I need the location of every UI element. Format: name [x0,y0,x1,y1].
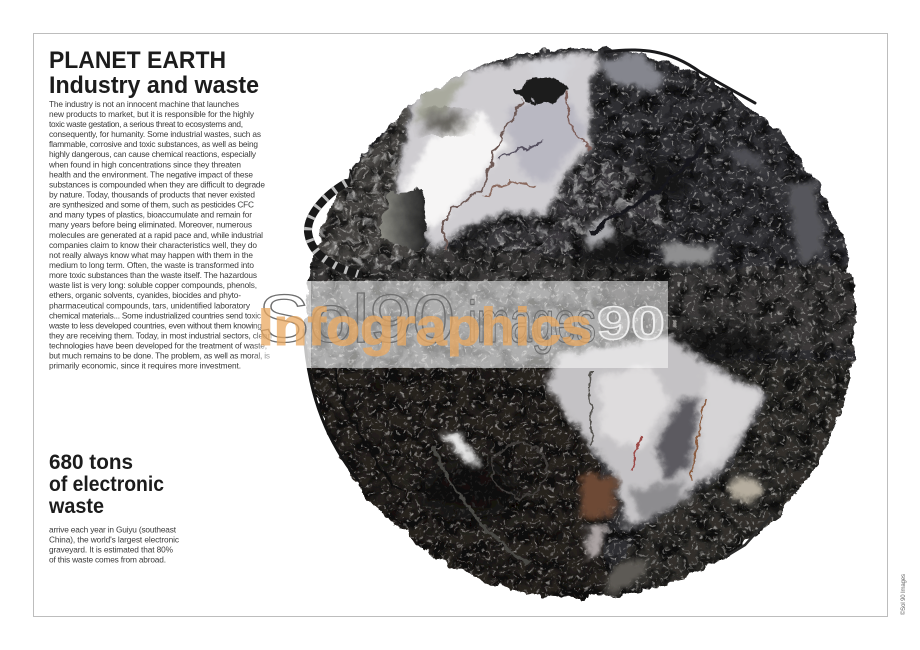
debris beneath watermark [311,281,600,368]
title: Industry and waste [49,72,259,99]
body text: industry and waste: substances is compounded when they are difficult to degrade [49,180,265,190]
body text: industry and waste: they are receiving them. Today, in most industrial sectors, clean [49,330,272,340]
watermark: Sol90images outline: Sol90 [258,281,455,357]
light scrap in upper right [585,150,825,265]
body text: industry and waste: primarily economic, since it requires more investment. [49,360,241,370]
rust streaks on southern patch [590,370,705,480]
title [49,47,259,99]
body text: industry and waste: many years before being eliminated. Moreover, numerous [49,220,252,230]
centre mixed rubble [440,160,670,258]
title: PLANET EARTH [49,47,226,74]
body text: industry and waste: but much remains to be done. The problem, as well as moral, is [49,350,270,360]
white sheet: northern patch [393,52,665,253]
grey stones, bottom [440,432,762,597]
globe made of waste [290,40,870,610]
lower-left wires [335,370,547,565]
upper-right dark scrap [612,52,856,289]
body text: industry and waste: technologies have been developed for the treatment of waste, [49,340,267,350]
brown circuit block [580,473,616,517]
callout: 680 tons of electronic waste [48,451,179,564]
watermark fade over text [250,281,311,368]
black voids [420,150,780,520]
watermark: Sol90images outline: 90 [597,297,665,349]
watermark: Sol90images outline: images [468,290,596,355]
callout: 680 tons of electronic waste: China), the world's largest electronic [49,534,179,544]
body text: industry and waste: more toxic substances than the waste itself. The hazardous [49,270,257,280]
grey device box [380,190,426,252]
body text: industry and waste: toxic waste gestation, a serious threat to ecosystems and, [49,119,243,129]
body text: industry and waste [48,99,272,370]
callout: 680 tons of electronic waste: graveyard. It is estimated that 80% [49,544,174,554]
body text: industry and waste: health and the environment. The negative impact of these [49,170,253,180]
body text: industry and waste: not really always know what may happen with them in the [49,250,253,260]
globe base [290,40,870,610]
body text: industry and waste: new products to market, but it is responsible for the highly [49,109,255,119]
lower-left dark earth [300,360,610,610]
callout: 680 tons of electronic waste: arrive each year in Guiyu (southeast [49,524,177,534]
body text: industry and waste: companies claim to know their characteristics well, they do [49,240,257,250]
body text: industry and waste: waste list is very long: soluble copper compounds, phenols, [48,280,257,290]
body text: industry and waste: when found in high concentrations since they threaten [48,160,241,170]
watermark: Infographics: Infographics [258,298,592,357]
internal black cable [590,145,705,232]
body text: industry and waste: medium to long term. Often, the waste is transformed into [49,260,254,270]
body text: industry and waste: highly dangerous, can cause chemical reactions, especially [49,149,257,159]
cable rings around globe [304,50,772,557]
body text: industry and waste: chemical materials... Some industrialized countries send toxic [49,310,261,320]
body text: industry and waste: molecules are generated at a rapid pace and, while industrial [49,230,263,240]
lower-right dark rock [598,360,856,598]
white sheet: southern patch [545,335,767,527]
watermark: Sol90images outline [258,281,665,357]
body text: industry and waste: The industry is not an innocent machine that launches [49,99,239,109]
copyright: ©Sol 90 Images [900,574,907,615]
veins on northern patch [445,90,590,250]
equator band [300,247,860,350]
callout: 680 tons of electronic waste: of electronic [49,473,164,496]
black burn on northern patch [515,75,568,105]
callout: 680 tons of electronic waste: waste [48,495,104,518]
upper-left scrap rim [310,100,425,262]
callout: 680 tons of electronic waste: 680 tons [49,451,133,474]
body text: industry and waste: waste to less developed countries, even without them knowing [48,320,262,330]
body text: industry and waste: pharmaceutical compounds, tars, unidentified laboratory [49,300,251,310]
body text: industry and waste: ethers, organic solvents, cyanides, biocides and phyto- [49,290,241,300]
body text: industry and waste: consequently, for humanity. Some industrial wastes, such as [49,129,261,139]
body text: industry and waste: flammable, corrosive and toxic substances, as well as being [49,139,258,149]
callout: 680 tons of electronic waste: of this waste comes from abroad. [49,554,166,564]
watermark panel [311,281,668,368]
body text: industry and waste: by nature. Today, thousands of products that never existed [49,190,255,200]
body text: industry and waste: and many types of plastics, bioaccumulate and remain for [49,210,252,220]
scorch mark [423,112,467,132]
body text: industry and waste: are synthesized and some of them, such as pesticides CFC [49,200,254,210]
